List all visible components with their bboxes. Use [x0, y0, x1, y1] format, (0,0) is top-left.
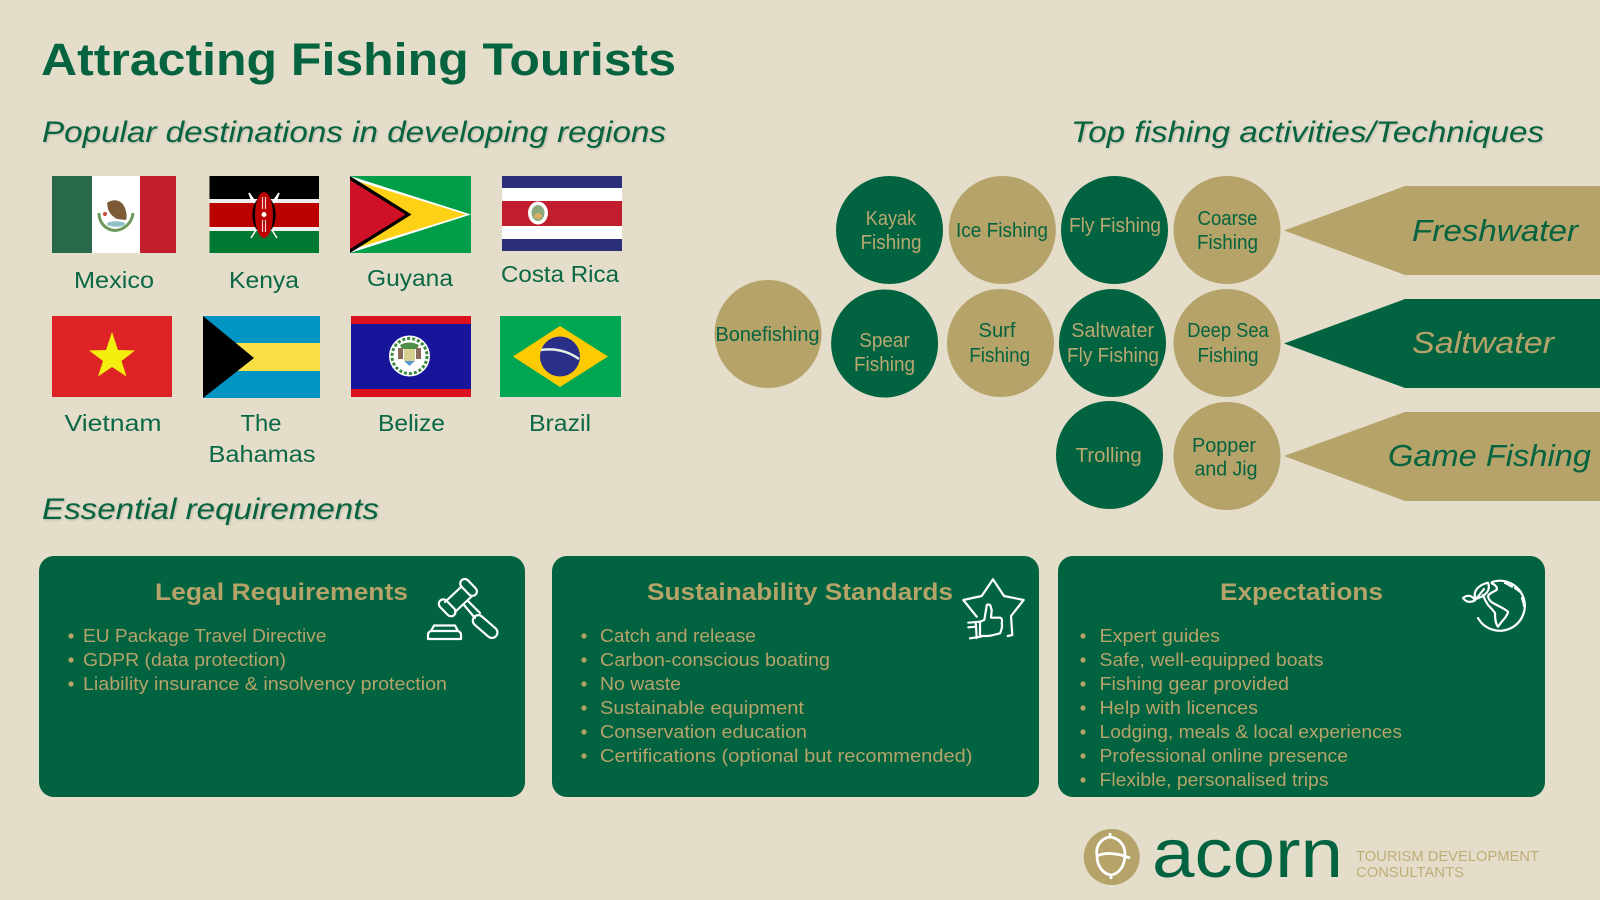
tagline: CONSULTANTS [1356, 864, 1464, 881]
label: Brazil: Brazil [529, 410, 591, 436]
circle: Trolling [1056, 401, 1163, 509]
circle: Coarse Fishing [1174, 176, 1280, 284]
label: The Bahamas: Bahamas [208, 441, 316, 467]
flag: Costa Rica [502, 176, 622, 251]
panel: sustainability standards [552, 556, 1039, 797]
bullet list: expectations: Help with licences [1100, 698, 1258, 718]
circle: Fly Fishing [1061, 176, 1168, 284]
bullet list: legal: EU Package Travel Directive [83, 626, 326, 646]
circle: Coarse Fishing: Coarse [1198, 208, 1258, 230]
circle: Bonefishing [714, 280, 822, 388]
label: Vietnam: Vietnam [64, 410, 162, 436]
flag: Guyana [350, 176, 471, 253]
circle: Kayak Fishing: Kayak [866, 208, 917, 230]
bullet list: sustainability: Certifications (optional but recommended) [600, 746, 972, 766]
circle: Kayak Fishing: Fishing [860, 232, 922, 254]
diagram: fishing techniques [714, 176, 1600, 510]
circle: Ice Fishing [949, 176, 1056, 284]
panel heading: Legal Requirements [155, 579, 408, 606]
bullet list: expectations: Expert guides [1100, 626, 1220, 646]
panel: expectations [1058, 556, 1545, 797]
circle: Deep Sea Fishing: Fishing [1198, 345, 1258, 367]
arrow: Saltwater [1284, 299, 1600, 388]
bullet list: sustainability: Carbon-conscious boating [600, 650, 830, 670]
icon: globe with leaf [1463, 581, 1525, 631]
flag: The Bahamas [203, 316, 320, 398]
bullet list: legal [68, 626, 447, 694]
circle: Bonefishing: Bonefishing [716, 324, 820, 346]
circle: Spear Fishing: Fishing [854, 354, 915, 376]
logo: acorn [1084, 815, 1539, 892]
label: The Bahamas [208, 410, 316, 467]
bullet list: expectations: Fishing gear provided [1100, 674, 1289, 694]
label: Costa Rica: Costa Rica [501, 261, 619, 287]
circle: Ice Fishing: Ice Fishing [956, 220, 1048, 242]
circle: Spear Fishing [831, 290, 938, 398]
label: Guyana: Guyana [367, 265, 453, 291]
circle: Trolling: Trolling [1076, 445, 1142, 467]
label: Kenya: Kenya [229, 267, 299, 293]
label: Mexico: Mexico [74, 267, 154, 293]
title: Attracting Fishing Tourists [41, 34, 676, 85]
label: The Bahamas: The [240, 410, 282, 436]
bullet list: expectations: Professional online presence [1100, 746, 1348, 766]
icon: star with thumbs up [963, 579, 1024, 638]
circle: Surf Fishing: Surf [978, 320, 1016, 342]
bullet list: legal: GDPR (data protection) [83, 650, 286, 670]
circle: Surf Fishing [947, 289, 1054, 397]
circle: Deep Sea Fishing [1174, 289, 1280, 397]
flag: Kenya [210, 176, 319, 253]
bullet list: expectations [1080, 626, 1402, 790]
arrow: Game Fishing [1284, 412, 1600, 501]
bullet list: sustainability: Conservation education [600, 722, 807, 742]
panel heading: Expectations [1220, 579, 1383, 606]
circle: Coarse Fishing: Fishing [1197, 232, 1258, 254]
bullet list: sustainability: Sustainable equipment [600, 698, 804, 718]
circle: Deep Sea Fishing: Deep Sea [1187, 320, 1270, 342]
bullet list: expectations: Lodging, meals & local experiences [1100, 722, 1402, 742]
arrow: Game Fishing: Game Fishing [1388, 438, 1591, 473]
panel heading: Sustainability Standards [647, 579, 953, 606]
icon: gavel [428, 577, 500, 640]
flag: Mexico [52, 176, 176, 253]
flag: Brazil [500, 316, 621, 397]
arrow: Freshwater: Freshwater [1412, 213, 1580, 248]
circle: Popper and Jig: Popper [1192, 435, 1256, 457]
tagline [1356, 848, 1539, 881]
circle: Fly Fishing: Fly Fishing [1069, 215, 1161, 237]
heading: popular destinations: Popular destinations in developing regions [42, 116, 666, 149]
bullet list: expectations: Flexible, personalised trips [1100, 770, 1328, 790]
icon: acorn emblem [1084, 829, 1140, 885]
flag: Vietnam [52, 316, 172, 397]
wordmark: acorn [1152, 815, 1343, 892]
circle: Popper and Jig: and Jig [1194, 458, 1258, 480]
label: Belize: Belize [378, 410, 445, 436]
heading: essential requirements: Essential requirements [42, 493, 379, 526]
arrow: Saltwater: Saltwater [1412, 325, 1556, 360]
circle: Popper and Jig [1174, 402, 1280, 510]
circle: Saltwater Fly Fishing: Saltwater [1071, 320, 1155, 342]
panel: destination flags [52, 176, 622, 467]
circle: Saltwater Fly Fishing [1059, 289, 1166, 397]
circle: Kayak Fishing [836, 176, 943, 284]
tagline: TOURISM DEVELOPMENT [1356, 848, 1539, 865]
bullet list: sustainability: No waste [600, 674, 681, 694]
circle: Saltwater Fly Fishing: Fly Fishing [1067, 345, 1159, 367]
panel: legal requirements [39, 556, 525, 797]
bullet list: sustainability: Catch and release [600, 626, 756, 646]
bullet list: sustainability [581, 626, 972, 766]
flag: Belize [351, 316, 471, 397]
bullet list: expectations: Safe, well-equipped boats [1100, 650, 1324, 670]
arrow: Freshwater [1284, 186, 1600, 275]
circle: Spear Fishing: Spear [859, 330, 910, 352]
circle: Surf Fishing: Fishing [969, 345, 1030, 367]
bullet list: legal: Liability insurance & insolvency protection [83, 674, 447, 694]
heading: top fishing activities: Top fishing activities/Techniques [1071, 116, 1544, 149]
